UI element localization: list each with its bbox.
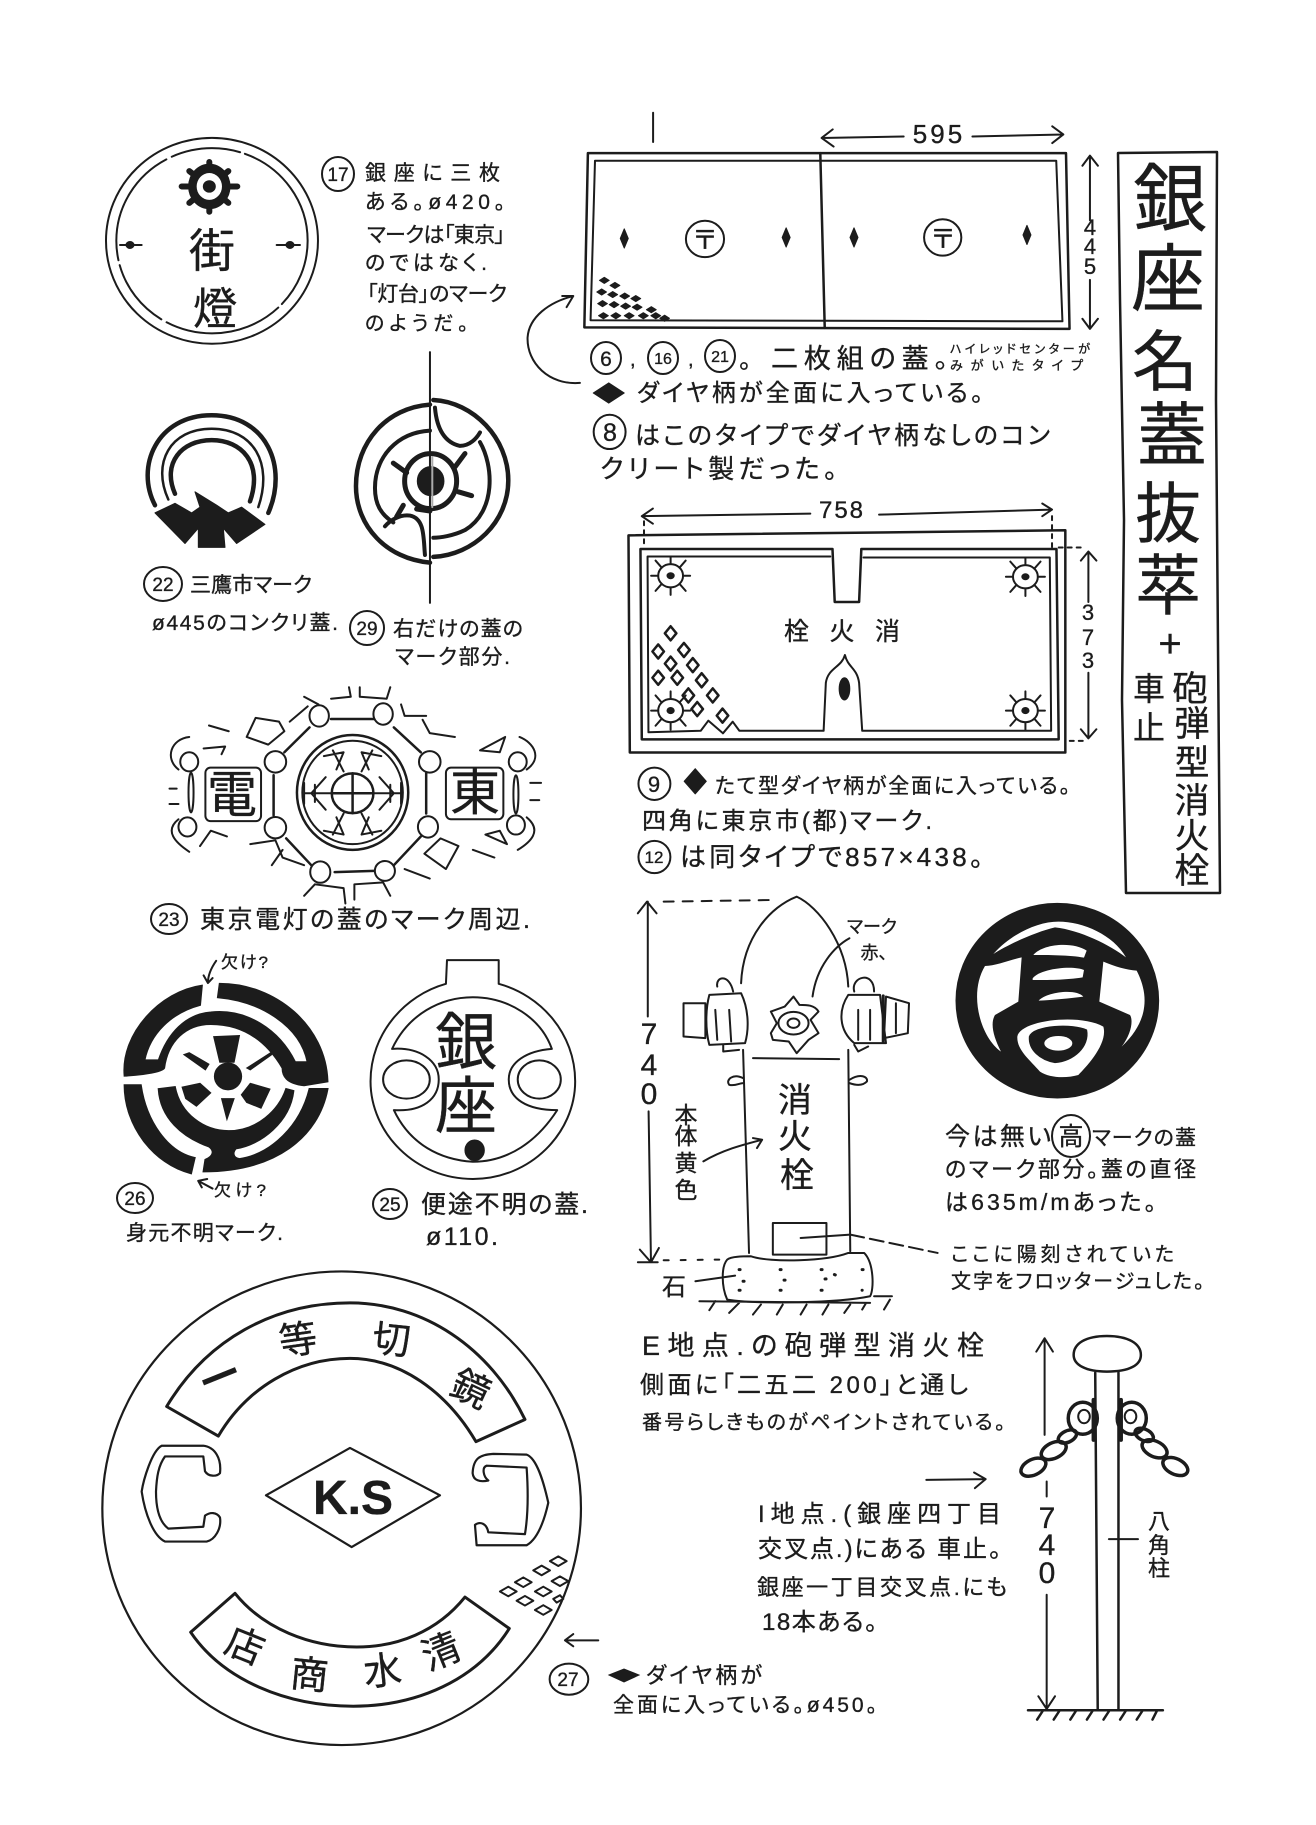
text: box characters: 電 [207,767,257,823]
text: No.17 note: のではなく. [365,252,487,275]
text: K.S emblem: K.S [313,1472,393,1525]
text: octagonal column: 角 [1148,1533,1170,1558]
text: lower band characters: 店 [219,1620,270,1673]
subtitle: shell-type hydrant: 型 [1174,744,1210,783]
text: No.27 note: 全面に入っている。ø450。 [613,1694,877,1717]
text: frottage note: ここに陽刻されていた [951,1243,1174,1266]
badges 6 16 21: , [630,349,636,371]
text: cover characters [435,1009,497,1142]
text: height 740: 4 [1039,1529,1055,1562]
panel: No.25 Ginza cover [371,960,588,1251]
text: No.17 note [365,162,507,335]
text: hydrant characters: 消 [778,1082,812,1120]
drawing: large cover [102,1271,598,1745]
badge 17 [322,157,354,191]
notes text: ハイレッドセンターが [949,341,1090,356]
curved arrow to diamond pattern [528,296,580,383]
text: octagonal column [1148,1509,1170,1581]
text: No.26 caption: 身元不明マーク. [126,1222,283,1245]
text: body yellow note: 黄 [674,1150,698,1176]
notes text: みがいたタイプ [950,358,1083,373]
panel: bollard [757,1336,1192,1720]
text: body yellow note: 本 [674,1102,698,1128]
text: box characters [207,765,500,823]
text block: E point hydrant note: E地点.の砲弾型消火栓 [642,1331,984,1361]
panel: No.26 unknown mark [117,953,327,1245]
text: postal marks [694,224,954,255]
subtitle: shell-type hydrant: 砲 [1172,670,1208,709]
text: No.25 caption: ø110. [426,1223,498,1251]
text: Taka caption: のマーク部分。蓋の直径 [945,1157,1196,1182]
panel: Taka mark [945,903,1196,1215]
text: height 740: 4 [641,1049,657,1082]
subtitle: shell-type hydrant: 火 [1174,817,1210,856]
notes text: たて型ダイヤ柄が全面に入っている。 [715,775,1070,798]
text: No.22 caption: ø445のコンクリ蓋. [152,612,338,635]
badges 6 16 21 [591,340,751,374]
text: No.17 note: マークは「東京」 [367,224,505,247]
drawing: ornamental mark [169,687,541,903]
text: cover inscription: 栓火消 [784,618,900,646]
text: body yellow note: 体 [674,1123,698,1149]
badge 29 [350,611,384,645]
drawing: black maze mark [124,961,327,1189]
text: hydrant characters: 火 [778,1118,812,1156]
text: lower band characters: 商 [288,1653,330,1699]
text: No.22 caption [152,574,338,635]
main title: 蓋 [1137,397,1207,475]
text: cover characters: 座 [435,1073,497,1142]
text block: E point hydrant note: 側面に「二五二 200」と通し [640,1372,968,1399]
text: dimension 445: 5 [1084,254,1096,279]
text: No.17 note: 「灯台」のマーク [367,283,507,306]
text: upper band characters: 切 [370,1318,412,1364]
panel: two-piece cover 595 x 445 [584,113,1098,329]
badge 25 [373,1189,407,1219]
text: mark red note: 赤、 [860,943,888,963]
text: mark red note [847,917,897,963]
text: dimension 373: 3 [1082,648,1094,673]
text: octagonal column: 柱 [1148,1556,1170,1581]
notes text: 9 [648,772,660,797]
text: mark red note: マーク [847,917,897,937]
badges 6 16 21: 。 [739,347,751,374]
notes text: 二枚組の蓋。 [771,344,948,374]
text: I point note: 交叉点.)にある 車止。 [758,1536,1001,1563]
text: chip notes: 欠け? [214,1181,266,1200]
text: chip notes: 欠け? [221,953,268,972]
notes text: は同タイプで857×438。 [680,842,983,872]
main title: 座 [1131,238,1205,321]
text: No.17 note: 銀座に三枚 [365,162,500,185]
text: Taka caption: マークの蓋 [1092,1127,1196,1150]
text: height 740 [641,1018,657,1111]
text: box characters: 東 [450,765,500,821]
drawing: two-piece rectangular cover [584,113,1098,329]
title box [1118,152,1220,893]
main title [1131,158,1207,623]
text: hydrant characters: 栓 [780,1157,814,1195]
notes text: ダイヤ柄が全面に入っている。 [637,380,983,407]
panel: No.23 Tokyo Electric Light mark [151,687,541,934]
badges 6 16 21: 6 [600,348,612,371]
text: I point note: 銀座一丁目交叉点.にも [757,1575,1007,1600]
text: I point note: I地点.(銀座四丁目 [758,1501,1001,1528]
text: No.22 caption: 三鷹市マーク [190,574,312,597]
text: height 740: 0 [1039,1557,1055,1590]
badge 26: 26 [124,1189,146,1210]
text: body yellow note: 色 [674,1177,698,1203]
drawing: Taka mark [956,903,1159,1098]
panel: No.29 right half mark [350,352,523,669]
main title: 名 [1132,325,1198,399]
text: I point note: 18本ある。 [762,1609,877,1636]
text: chip notes [214,953,268,1200]
text: No.29 caption [393,618,523,669]
text: No.27 note: ダイヤ柄が [646,1663,762,1688]
text: dimension 445: 4 [1084,215,1096,240]
text: frottage note: 文字をフロッタージュした。 [951,1270,1204,1293]
text: dimension 595: 595 [913,119,965,149]
text: lamp characters [189,225,237,334]
badge 25: 25 [379,1195,401,1216]
text: dimension 445: 4 [1084,234,1096,259]
badge 23 [151,904,187,934]
subtitle: shell-type hydrant: 消 [1174,782,1210,821]
text: lamp characters: 街 [189,225,235,277]
text: lower band characters: 水 [362,1649,404,1695]
text: upper band characters: 等 [277,1318,320,1365]
notes text: はこのタイプでダイヤ柄なしのコン [635,422,1050,450]
notes text: クリート製だった。 [600,454,837,484]
badge 22 [144,567,182,601]
text: upper band characters: 鏡 [444,1363,496,1417]
text: height 740: 7 [641,1018,657,1051]
text: No.27 note [609,1663,877,1717]
text: dimension 758: 758 [819,497,865,524]
text: No.17 note: ある。ø420。 [365,191,505,214]
text: stone label: 石 [662,1274,686,1301]
badges 6 16 21: , [688,349,694,371]
text block: hydrant cover notes [638,768,1070,873]
text: dimension 373: 3 [1082,600,1094,625]
text: No.17 note: のようだ。 [365,313,468,335]
text: Taka caption: 今は無い [945,1123,1051,1151]
panel: No.27 large cover [102,1271,877,1745]
text: height 740: 0 [641,1078,657,1111]
text: No.23 caption: 東京電灯の蓋のマーク周辺. [200,906,530,934]
text block: two-piece cover notes [591,340,1090,484]
text: lower band characters [219,1620,467,1699]
notes text: 12 [645,848,663,867]
text: height 740 [1039,1502,1055,1590]
subtitle: shell-type hydrant [1172,670,1210,891]
text: No.25 caption [421,1191,588,1251]
text: postal marks: 〒 [932,224,954,254]
badge 23: 23 [158,910,180,931]
badge 22: 22 [152,575,174,596]
text: Taka caption [945,1115,1196,1215]
main title: 萃 [1135,549,1201,623]
notes text [642,772,1070,872]
drawing: rectangular hydrant cover [628,504,1096,752]
panel: No.22 Mitaka city mark [144,415,338,635]
drawing: small round cover [371,960,575,1179]
text: cover characters: 銀 [435,1009,497,1078]
text: dimension 445 [1084,215,1096,279]
text: lower band characters: 清 [416,1626,467,1679]
main title: 抜 [1135,477,1201,551]
subtitle: bollard [1133,671,1165,746]
text: upper band characters [195,1318,496,1417]
icons: diamond and circle 8 [593,383,626,449]
text: lamp characters: 燈 [193,285,237,334]
badge 29: 29 [356,619,378,640]
notes text: 四角に東京市(都)マーク. [642,808,932,835]
text: hydrant characters [778,1082,814,1195]
drawing: split round mark [356,352,508,603]
panel: No.17 street-lamp cover [106,138,507,344]
badge 26 [117,1183,153,1213]
text: upper band characters: 一 [195,1352,246,1405]
text: No.25 caption: 便途不明の蓋. [421,1191,588,1219]
text block: E point hydrant note: 番号らしきものがペイントされている。 [642,1411,1005,1434]
badge 27: 27 [557,1670,579,1691]
drawing: hydrant [638,897,938,1315]
badge 17: 17 [327,165,349,186]
icons: badges and diamond [638,768,706,873]
plus: + [1158,622,1182,666]
drawing: Mitaka mark [148,415,276,547]
drawing: bollard with chain [926,1336,1192,1720]
subtitle: bollard: 車 [1133,671,1165,707]
badges 6 16 21: 16 [654,351,672,368]
text block: E point hydrant note [640,1331,1005,1434]
text: postal marks: 〒 [694,225,716,255]
text: No.29 caption: マーク部分. [395,646,510,669]
notes text: 8 [603,419,617,447]
text: Taka caption: 高 [1058,1123,1084,1151]
main title: 銀 [1133,158,1207,241]
text: body yellow note [674,1102,698,1203]
text: octagonal column: 八 [1148,1509,1170,1534]
text: Taka caption: は635m/mあった。 [945,1189,1156,1215]
text: dimension 373 [1082,600,1094,673]
text: frottage note [951,1243,1204,1293]
subtitle: shell-type hydrant: 栓 [1174,852,1210,891]
text: I point note [757,1501,1007,1636]
text: dimension 373: 7 [1082,625,1094,650]
badges 6 16 21: 21 [711,349,729,366]
subtitle: shell-type hydrant: 弾 [1174,705,1210,744]
box frame [1118,152,1220,893]
panel: shell-type hydrant [638,897,1204,1315]
subtitle: bollard: 止 [1133,710,1165,746]
notes text [600,341,1090,484]
panel: hydrant cover 758 x 373 [628,497,1096,752]
drawing: street-lamp cover [106,138,318,344]
text: No.29 caption: 右だけの蓋の [393,618,523,641]
text: height 740: 7 [1039,1502,1055,1535]
